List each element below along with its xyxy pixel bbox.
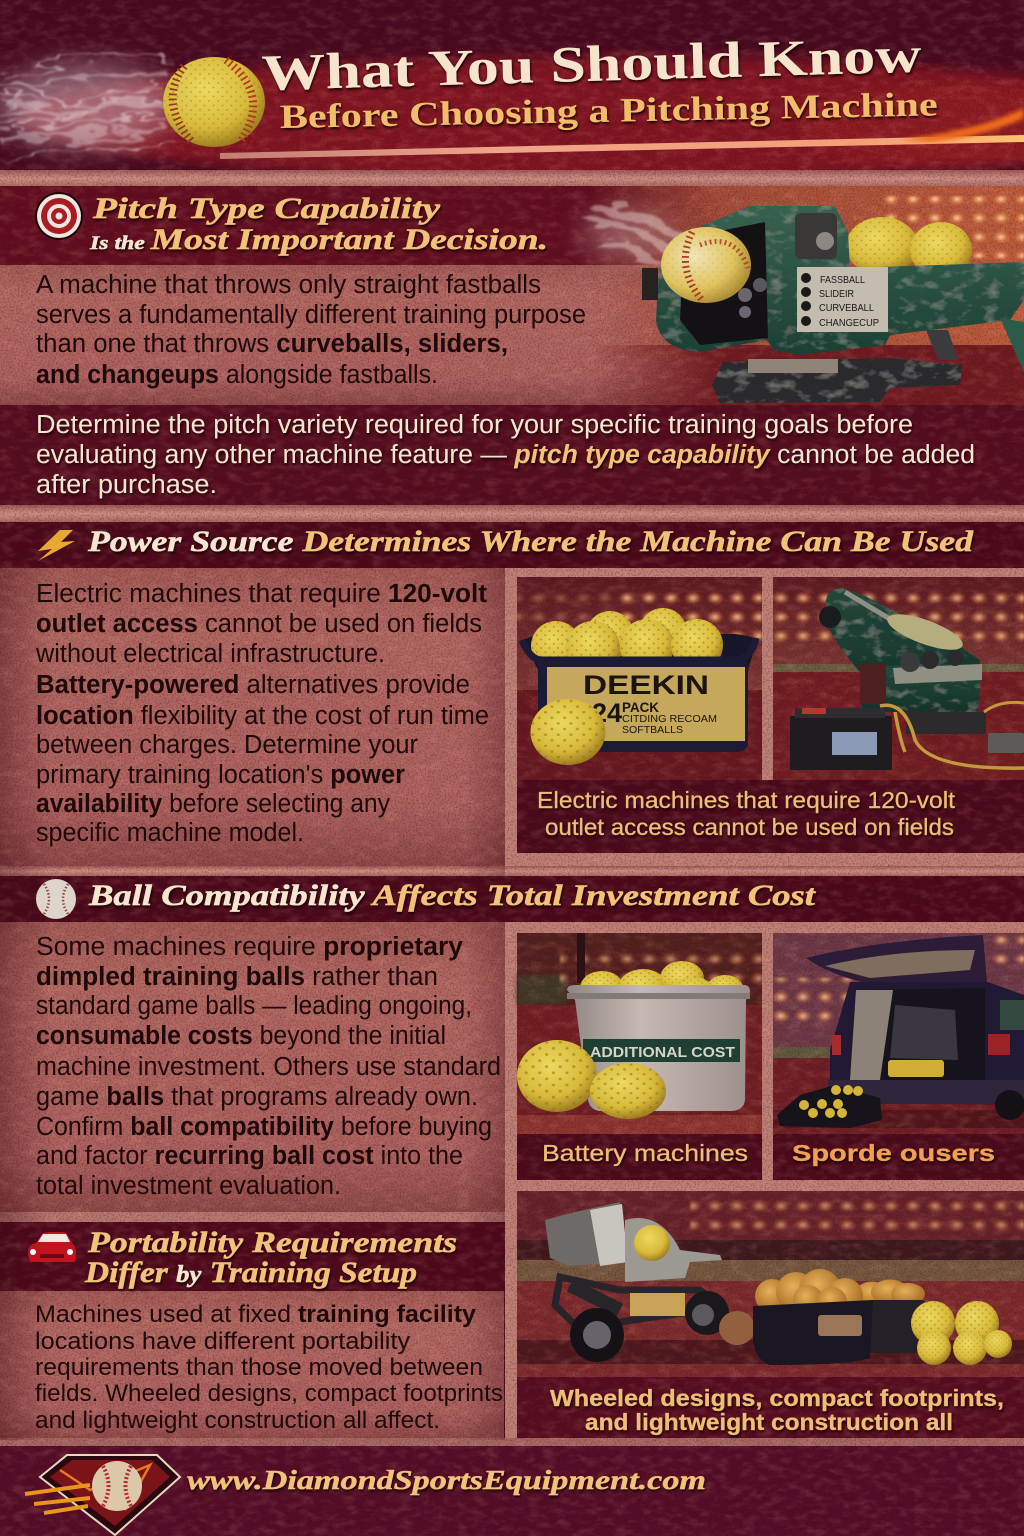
strip above power section [0,505,1024,522]
text: portability body: and lightweight construction all affect. [35,1407,440,1434]
text: pitch type body: serves a fundamentally different training purpose [36,301,586,329]
section 1 smoke [590,205,680,268]
panel: pitch type heading band [0,186,1024,265]
title [261,28,938,136]
panel: portability body [0,1291,504,1440]
illustration: ball basket [522,608,757,765]
header speed streak [220,108,1024,159]
heading: portability: Portability Requirements [87,1226,457,1259]
text: portability body: requirements than those moved between [35,1354,483,1381]
text: power source body: without electrical infrastructure. [35,640,385,668]
text: pitch type callout: Determine the pitch variety required for your specific training goals before [36,411,913,439]
machine label plate: SLIDEIR [819,288,854,300]
bucket label [583,1039,740,1062]
text: power source body: availability before selecting any [36,790,390,818]
heading: pitch type capability [89,192,548,256]
header smoke trail [0,57,175,155]
text: power source body: outlet access cannot be used on fields [36,610,482,638]
caption: wheeled designs: and lightweight construction all [585,1409,953,1435]
text: pitch type body: A machine that throws only straight fastballs [36,271,541,299]
caption: electric machines [537,787,956,840]
text: power source body: between charges. Determine your [36,731,419,759]
text: pitch type body: than one that throws curveballs, sliders, [36,330,508,358]
scene background: vehicle [773,933,1024,1134]
text: ball compatibility body: machine investment. Others use standard [36,1053,501,1081]
text: ball compatibility body: dimpled training balls rather than [36,963,438,991]
subtitle: Before Choosing a Pitching Machine [279,86,938,136]
caption panel: sporde ousers [773,1134,1024,1180]
text: portability body: Machines used at fixed training facility [35,1301,476,1328]
illustration: vehicle with machine in trunk [777,935,1024,1128]
panel: power source body [0,568,505,866]
scene background: bucket [517,933,762,1134]
rock [719,1311,755,1345]
panel: footer band [0,1446,1024,1536]
text: pitch type callout: evaluating any other machine feature — pitch type capability cannot be added [36,441,975,469]
caption: battery machines: Battery machines [542,1140,748,1166]
panel: header background [0,0,1024,180]
text: portability body [35,1301,503,1434]
caption panel: wheeled designs [517,1377,1024,1438]
text: ball compatibility body: standard game balls — leading ongoing, [36,992,472,1020]
strip under header [0,170,1024,187]
yellow ball pile [911,1301,1012,1365]
text: ball compatibility body [36,933,501,1200]
strip above portability [0,1212,505,1222]
logo: diamond with baseball [25,1455,180,1535]
text: ball compatibility body: Some machines require proprietary [36,933,464,961]
text: power source body [35,580,489,847]
machine label plate: CURVEBALL [819,302,874,314]
scene background: ball basket [517,577,762,780]
car hatch [806,935,987,984]
ball tub front [753,1269,873,1365]
text: power source body: location flexibility at the cost of run time [36,702,489,730]
icon: baseball [36,879,76,919]
basket label text: CITDING RECOAM [622,714,717,725]
panel: pitch type body [0,265,1024,405]
icon: target [35,192,83,240]
section 1 smoke cloud [580,210,680,260]
stadium lights [517,196,1024,1232]
text: ball compatibility body: game balls that programs already own. [36,1083,478,1111]
header smoke cloud [0,63,175,147]
car battery [790,708,892,770]
heading: pitch type capability: Pitch Type Capability [92,192,441,225]
caption: wheeled designs [550,1385,1004,1435]
text: ball compatibility body: and factor recurring ball cost into the [36,1142,463,1170]
heading: ball compatibility: Ball Compatibility Affects Total Investment Cost [88,879,817,912]
caption: sporde ousers: Sporde ousers [792,1140,995,1166]
text: pitch type callout [36,411,975,499]
panel: right column frame [505,922,1024,1445]
heading: power source: Power Source Determines Where the Machine Can Be Used [87,525,974,558]
machine label plate: FASSBALL [820,274,865,286]
illustration: machine with battery [790,588,1024,770]
caption: electric machines: outlet access cannot be used on fields [545,814,954,840]
text: ball compatibility body: total investment evaluation. [36,1172,341,1200]
text: ball compatibility body: consumable costs beyond the initial [36,1022,446,1050]
text: power source body: specific machine model. [36,819,304,847]
text: portability body: fields. Wheeled designs, compact footprints [35,1380,503,1407]
icon: lightning bolt [38,530,75,561]
icon: car [28,1232,76,1262]
scene background: machine with battery [773,577,1024,780]
caption: electric machines: Electric machines that require 120-volt [537,787,956,813]
title: What You Should Know [261,28,922,102]
caption panel: battery machines [517,1134,762,1180]
panel: power source heading band [0,522,1024,568]
basket label text: SOFTBALLS [622,725,683,736]
caption: wheeled designs: Wheeled designs, compact footprints, [550,1385,1004,1411]
panel: ball compatibility heading band [0,876,1024,922]
text: pitch type callout: after purchase. [36,471,217,499]
scene background: pitching machine [590,186,1024,405]
basket label text: 24 [592,698,622,728]
heading: portability: Differ by Training Setup [84,1256,417,1289]
machine label plate: CHANGECUP [819,317,879,329]
panel: portability heading band [0,1222,504,1291]
caption panel: power source [517,780,1024,853]
basket label text [585,676,716,733]
ball tub back [855,1280,927,1353]
text: power source body: Electric machines that require 120-volt [36,580,488,608]
strip above ball section [0,866,1024,876]
text: ball compatibility body: Confirm ball compatibility before buying [36,1113,492,1141]
text: power source body: primary training location's power [36,761,405,789]
text: pitch type body [36,271,586,389]
heading: portability [84,1226,457,1289]
text: power source body: Battery-powered alternatives provide [36,671,470,699]
bucket label: ADDITIONAL COST [590,1044,735,1061]
heading: pitch type capability: Is the Most Important Decision. [89,223,548,256]
panel: power source right frame [505,568,1024,866]
basket label text: DEEKIN [583,670,709,700]
illustration: wheeled machine and ball tubs [545,1202,1012,1365]
illustration: additional cost bucket [517,933,750,1119]
text: portability body: locations have different portability [35,1328,411,1355]
header softball [163,57,265,147]
strip above footer [0,1438,1024,1446]
scene background: wheeled machine [517,1191,1024,1377]
ball bag [777,1085,882,1128]
text: pitch type body: and changeups alongside fastballs. [36,361,438,389]
panel: ball compatibility body [0,922,505,1212]
illustration: pitching machine with panel labels [642,206,1024,403]
machine label plate [797,267,888,332]
panel: pitch type dark callout band [0,405,1024,505]
footer url: www.DiamondSportsEquipment.com [187,1465,706,1495]
basket label text: PACK [622,699,659,715]
